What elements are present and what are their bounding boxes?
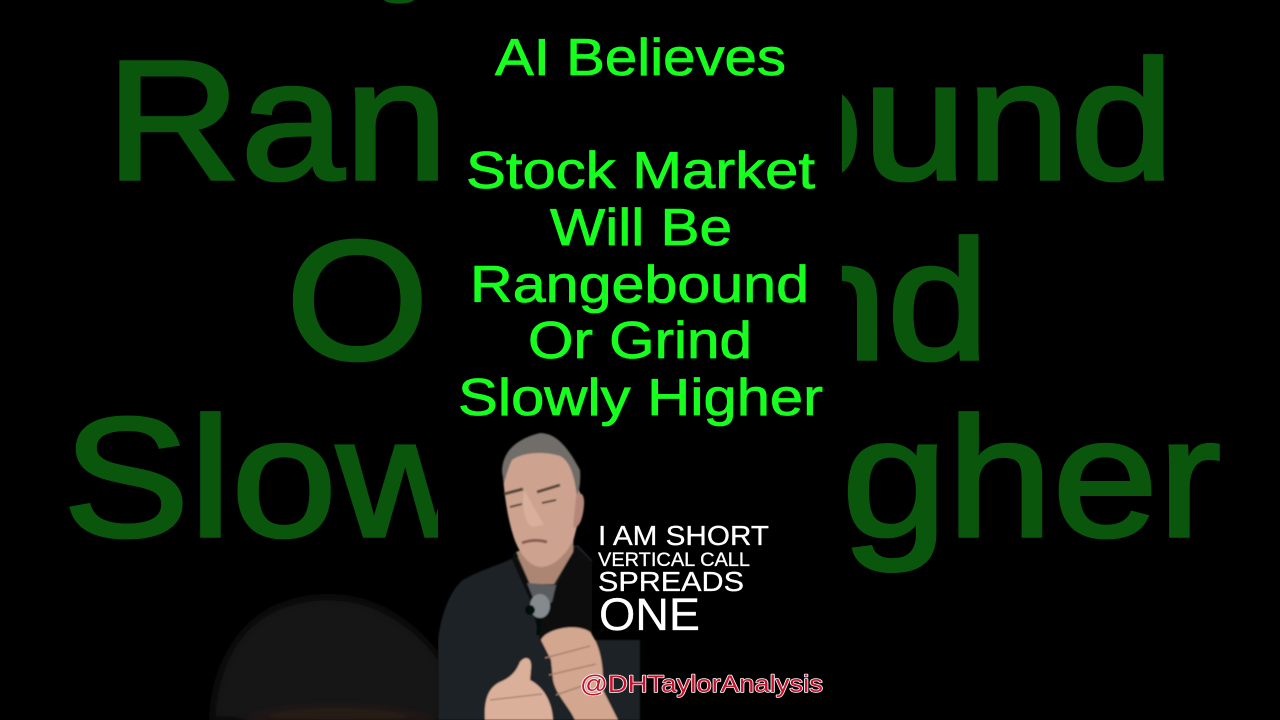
hair [502,433,580,496]
background: blurred enlarged head [212,597,445,720]
mouth [522,540,547,543]
center black panel [438,0,842,720]
background: enlarged dim headline: Rangebound [106,26,1174,216]
headline: Rangebound [470,256,809,314]
background: enlarged dim headline: Or Grind [286,206,989,396]
position caption: ONE [599,589,700,640]
sweater [438,545,640,720]
headline: Stock Market [466,142,816,200]
headline: AI Believes [495,29,786,87]
microphone [530,594,550,618]
finger creases [490,646,596,700]
position caption: I AM SHORT [598,520,769,551]
eyebrows [504,485,560,494]
nose [524,492,543,526]
headline [458,29,823,427]
position caption: SPREADS [598,566,744,597]
raised hand [541,627,618,720]
background: enlarged dim headline: Slowly Higher [63,383,1221,573]
position caption [598,520,769,640]
face [503,448,583,567]
t-shirt [526,582,558,604]
neck [514,538,575,585]
headline: Will Be [550,199,732,257]
lower hand [485,658,553,720]
headline: Or Grind [528,312,752,370]
closed eyes [510,500,556,507]
position caption: VERTICAL CALL [598,550,750,571]
background: enlarged dim headline [63,0,1221,573]
social handle: @DHTaylorAnalysis [580,671,823,698]
headline: Slowly Higher [458,369,823,427]
ear [573,494,584,528]
presenter figure [438,433,640,720]
collar [512,546,592,650]
